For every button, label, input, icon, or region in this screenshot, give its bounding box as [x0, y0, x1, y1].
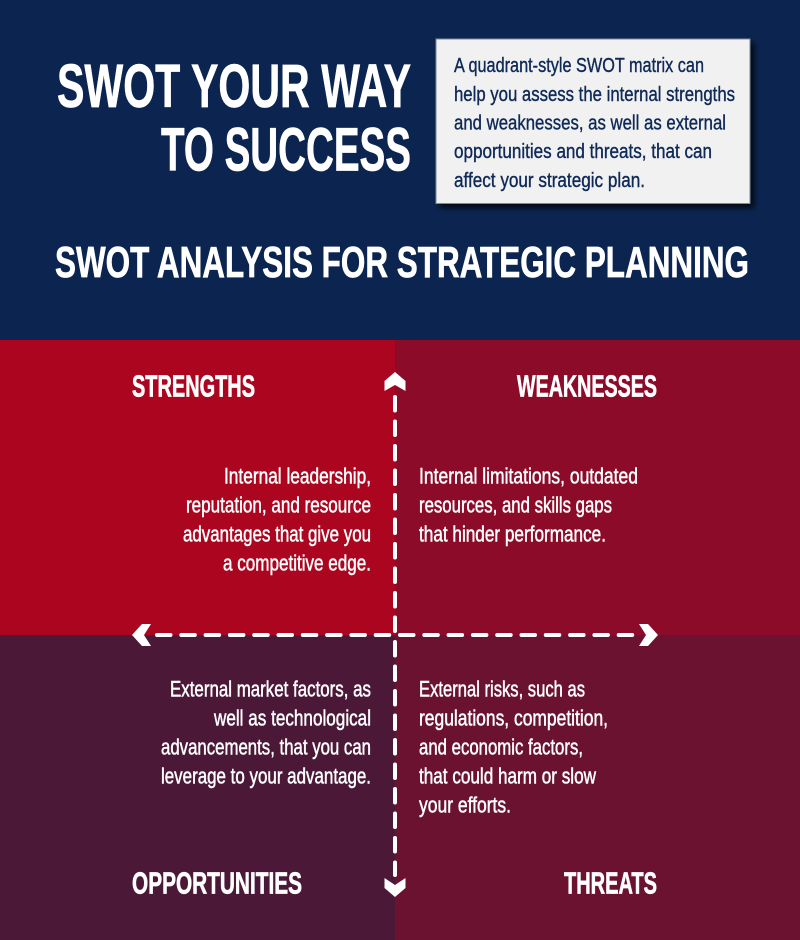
- text: strengths description: a competitive edge.: [223, 550, 371, 576]
- text: strengths description: advantages that give you: [183, 522, 371, 546]
- text: threats description: that could harm or slow: [419, 764, 596, 788]
- text: weaknesses description: Internal limitations, outdated: [419, 464, 638, 488]
- heading: strengths: STRENGTHS: [132, 368, 255, 404]
- callout: intro text box: A quadrant-style SWOT matrix can: [454, 54, 704, 77]
- arrow: horizontal axis: [132, 624, 658, 646]
- text: strengths description: Internal leadership,: [224, 464, 371, 488]
- text: opportunities description: well as technological: [213, 706, 371, 730]
- callout: intro text box: [436, 39, 750, 204]
- text: threats description: and economic factors,: [419, 734, 583, 760]
- title: TO SUCCESS: [161, 116, 411, 184]
- text: weaknesses description: resources, and skills gaps: [419, 492, 612, 518]
- text: threats description: your efforts.: [419, 792, 511, 818]
- text: threats description: [419, 676, 608, 818]
- callout: intro text box: opportunities and threats, that can: [454, 140, 712, 163]
- heading: opportunities: OPPORTUNITIES: [132, 866, 302, 900]
- text: weaknesses description: [419, 464, 638, 546]
- text: strengths description: reputation, and resource: [186, 492, 371, 518]
- text: opportunities description: [161, 676, 371, 788]
- text: threats description: External risks, such as: [419, 676, 585, 702]
- text: strengths description: [183, 464, 371, 576]
- panel: threats: [395, 635, 800, 940]
- title: SWOT YOUR WAY: [57, 52, 411, 120]
- heading: threats: THREATS: [564, 866, 657, 900]
- panel: strengths: [0, 340, 395, 635]
- callout: intro text box: affect your strategic plan.: [454, 169, 645, 192]
- text: opportunities description: advancements, that you can: [161, 734, 371, 760]
- text: weaknesses description: that hinder performance.: [419, 522, 606, 546]
- heading: weaknesses: WEAKNESSES: [517, 368, 657, 404]
- text: opportunities description: External market factors, as: [170, 676, 371, 702]
- header background panel: [0, 0, 800, 340]
- arrow: vertical axis: [384, 372, 406, 897]
- title: [57, 52, 411, 184]
- callout: intro text box: and weaknesses, as well as external: [454, 112, 726, 134]
- panel: weaknesses: [395, 340, 800, 635]
- text: opportunities description: leverage to your advantage.: [161, 764, 371, 788]
- text: threats description: regulations, competition,: [419, 706, 608, 730]
- panel: opportunities: [0, 635, 395, 940]
- callout: intro text box: help you assess the internal strengths: [454, 83, 735, 106]
